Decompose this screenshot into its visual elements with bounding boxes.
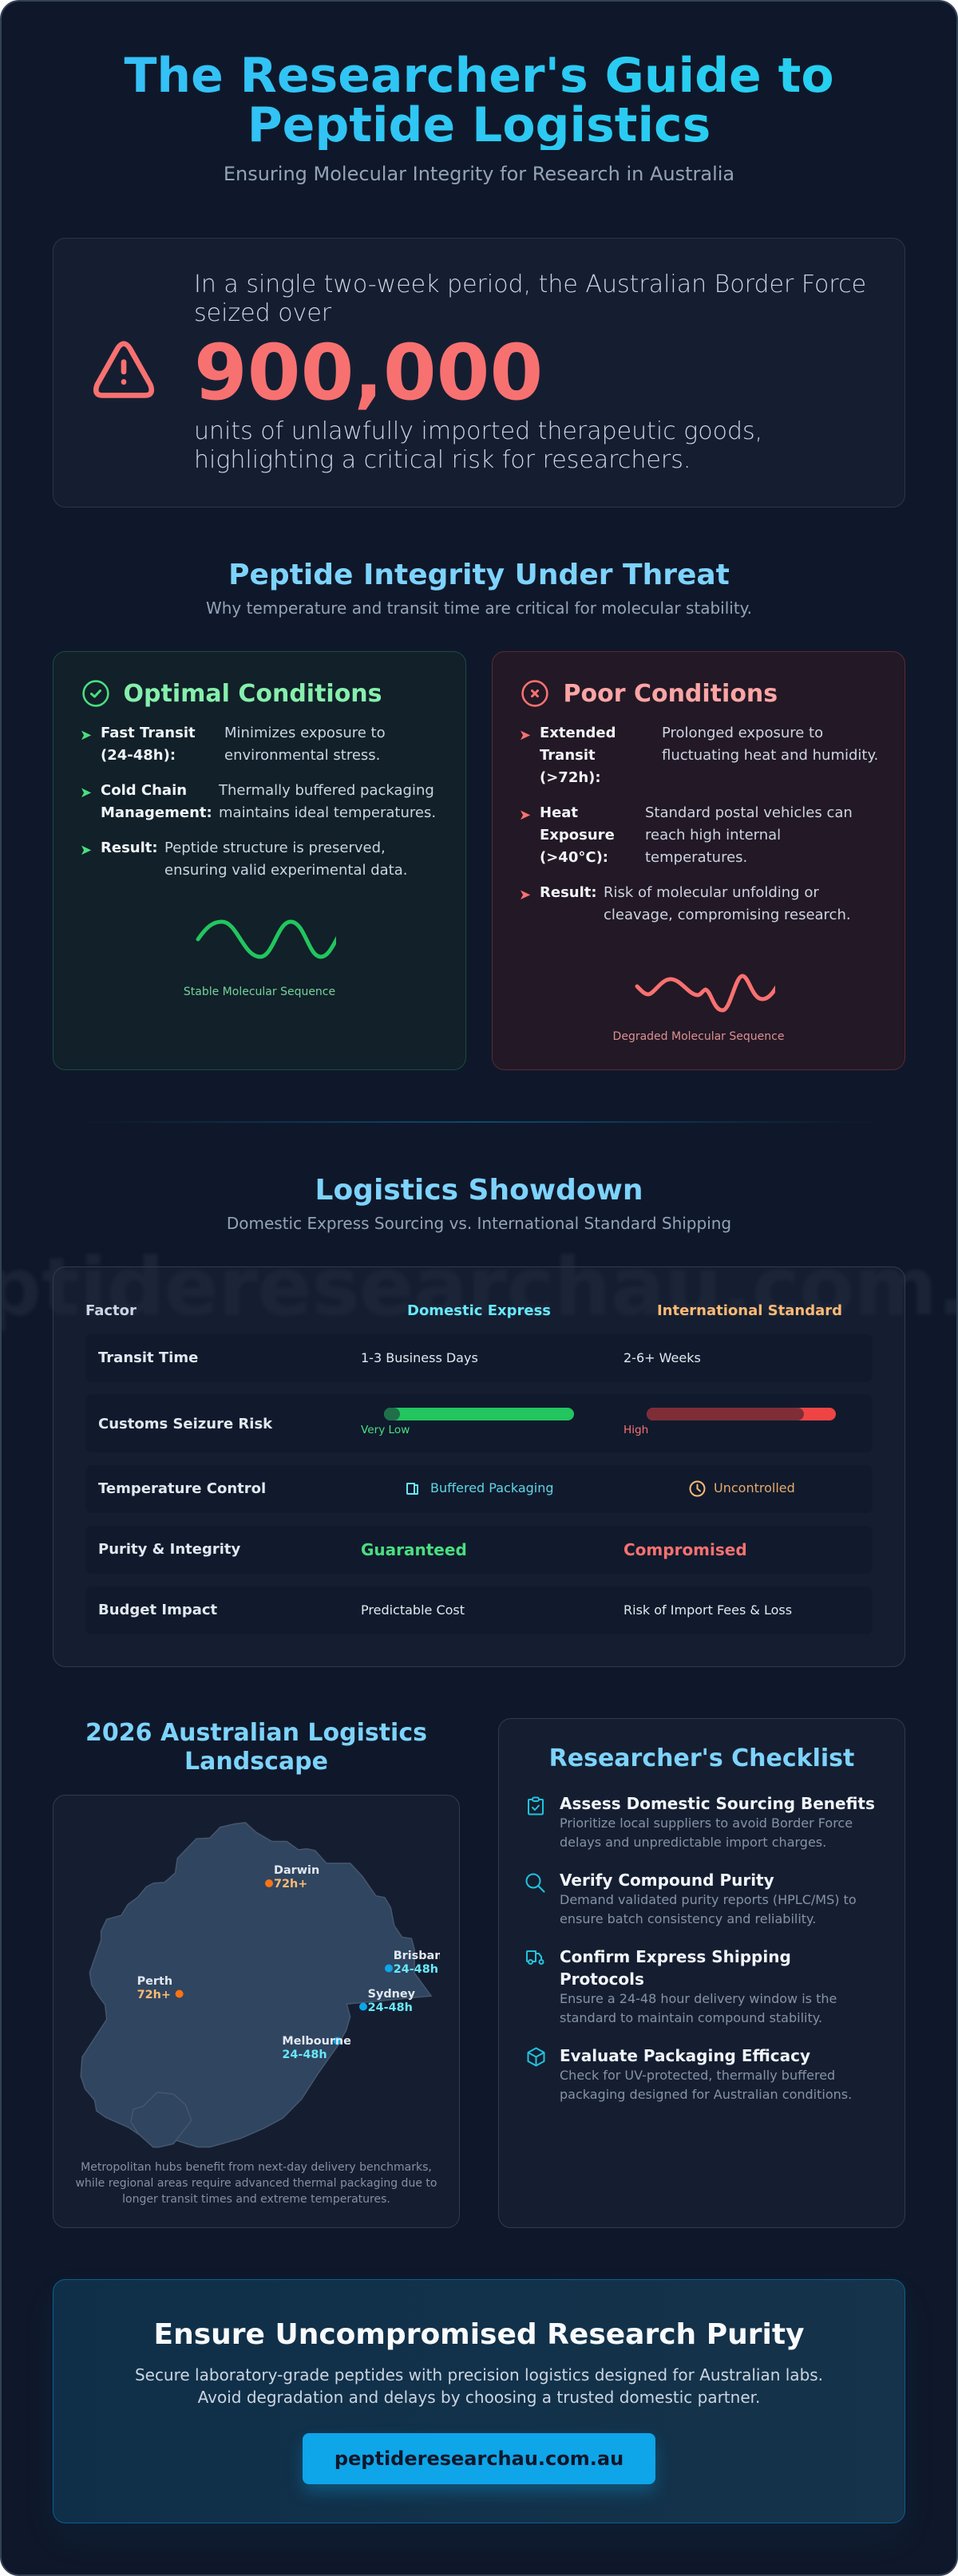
domestic risk label: Very Low xyxy=(361,1424,410,1436)
icon: check circle xyxy=(82,680,109,707)
bullet 2: Thermally buffered packaging xyxy=(219,782,434,799)
city: Brisbane: 24-48h xyxy=(394,1963,438,1976)
bullet 3 xyxy=(80,840,407,879)
icon: search xyxy=(525,1874,544,1893)
CTA button: peptideresearchau.com.au xyxy=(335,2448,623,2470)
item text xyxy=(560,2068,852,2102)
icon: package xyxy=(406,1483,418,1495)
CTA button xyxy=(303,2433,655,2484)
stable caption: Stable Molecular Sequence xyxy=(184,986,335,998)
checklist heading: Researcher's Checklist xyxy=(549,1744,854,1772)
bullet 3: Risk of molecular unfolding or xyxy=(604,884,819,901)
header: factor: Factor xyxy=(85,1302,137,1319)
bullet 1: Fast Transit xyxy=(101,725,196,741)
bullet 2: Cold Chain xyxy=(101,782,187,799)
bullet 2 xyxy=(519,804,853,866)
divider xyxy=(80,1121,878,1123)
item text: packaging designed for Australian conditions. xyxy=(560,2087,852,2102)
international risk label: High xyxy=(623,1424,648,1436)
bullet 1: ➤ xyxy=(519,727,531,744)
panel: checklist xyxy=(498,1718,905,2228)
bullet 1 xyxy=(80,725,386,764)
city: Melbourne xyxy=(283,2036,351,2058)
item 4 xyxy=(527,2046,852,2102)
panel: poor conditions xyxy=(492,651,905,1070)
poor heading: Poor Conditions xyxy=(564,680,778,708)
map caption: Metropolitan hubs benefit from next-day delivery benchmarks, xyxy=(81,2161,432,2174)
big number: 900,000 xyxy=(194,328,543,417)
bullet 2: Exposure xyxy=(540,827,615,844)
item text: Ensure a 24-48 hour delivery window is the xyxy=(560,1991,837,2006)
bullet 1: (24-48h): xyxy=(101,747,176,764)
title: The Researcher's Guide to xyxy=(124,48,834,104)
city: Brisbane: Brisbane xyxy=(394,1950,451,1962)
bullet 1: fluctuating heat and humidity. xyxy=(662,747,878,764)
item text xyxy=(560,1815,853,1850)
panel: map xyxy=(53,1795,460,2228)
domestic value: Predictable Cost xyxy=(361,1602,465,1618)
subheading: showdown: Domestic Express Sourcing vs. International Standard Shipping xyxy=(227,1214,731,1233)
bar: international risk xyxy=(647,1408,836,1420)
item 2 xyxy=(525,1871,857,1926)
bullet 1: Extended xyxy=(540,725,616,741)
item title xyxy=(560,1947,791,1989)
alert lead text: In a single two-week period, the Australian Border Force xyxy=(194,271,866,298)
title: Peptide Logistics xyxy=(247,97,711,153)
city: Perth xyxy=(137,1976,184,1998)
bullet 2: Management: xyxy=(101,804,212,821)
map caption: while regional areas require advanced thermal packaging due to xyxy=(76,2177,437,2190)
label: Customs Seizure Risk xyxy=(98,1416,272,1432)
bar: domestic risk xyxy=(384,1408,574,1420)
icon: x circle xyxy=(521,680,548,707)
bullet 3: cleavage, compromising research. xyxy=(604,907,851,923)
bullet 1: environmental stress. xyxy=(224,747,380,764)
item text: standard to maintain compound stability. xyxy=(560,2010,822,2025)
panel: optimal conditions xyxy=(53,651,466,1070)
item text: delays and unpredictable import charges. xyxy=(560,1835,826,1850)
item 3 xyxy=(526,1947,837,2025)
uncontrolled text: Uncontrolled xyxy=(714,1480,795,1495)
label: Budget Impact xyxy=(98,1602,217,1618)
map of Australia xyxy=(80,1822,440,2148)
icon: clock xyxy=(690,1481,706,1497)
alert tail text: units of unlawfully imported therapeutic goods, xyxy=(194,417,762,445)
label: Transit Time xyxy=(98,1349,198,1366)
bullet 2: Standard postal vehicles can xyxy=(645,804,853,821)
city: Perth: Perth xyxy=(137,1975,172,1988)
header: international: International Standard xyxy=(657,1302,842,1319)
bullet 2: temperatures. xyxy=(645,849,747,866)
item text: Check for UV-protected, thermally buffered xyxy=(560,2068,835,2083)
map caption: longer transit times and extreme temperatures. xyxy=(122,2193,390,2206)
bullet 1: Prolonged exposure to xyxy=(662,725,823,741)
bullet 3 xyxy=(519,884,851,923)
CTA heading: Ensure Uncompromised Research Purity xyxy=(153,2318,805,2351)
bullet 2: ➤ xyxy=(519,807,531,824)
bullet 3: Result: xyxy=(101,840,158,856)
chart: stable wave xyxy=(196,919,336,959)
alert tail text xyxy=(194,417,762,474)
bullet 2 xyxy=(80,782,436,821)
row: budget xyxy=(85,1586,873,1634)
bullet 2: reach high internal xyxy=(645,827,781,844)
heading: showdown: Logistics Showdown xyxy=(315,1174,643,1207)
icon: warning triangle xyxy=(93,341,155,398)
item title: Assess Domestic Sourcing Benefits xyxy=(560,1794,875,1813)
city: Darwin: Darwin xyxy=(274,1864,319,1877)
heading: map: 2026 Australian Logistics xyxy=(85,1719,427,1747)
international value: 2-6+ Weeks xyxy=(623,1350,701,1365)
bullet 1 xyxy=(519,725,878,786)
international value: Risk of Import Fees & Loss xyxy=(623,1602,792,1618)
buffered text: Buffered Packaging xyxy=(430,1480,554,1495)
bullet 2: ➤ xyxy=(80,784,92,801)
optimal heading: Optimal Conditions xyxy=(123,680,382,708)
bullet 1: (>72h): xyxy=(540,769,601,786)
item text: Prioritize local suppliers to avoid Border Force xyxy=(560,1815,853,1831)
city: Brisbane xyxy=(385,1950,440,1973)
bullet 3: Peptide structure is preserved, xyxy=(164,840,386,856)
icon: truck xyxy=(526,1950,544,1965)
bullet 1: Transit xyxy=(540,747,596,764)
bullet 1: Minimizes exposure to xyxy=(224,725,386,741)
bullet 2: Heat xyxy=(540,804,578,821)
alert lead text xyxy=(194,271,866,327)
CTA text xyxy=(135,2365,823,2407)
bullet 1: ➤ xyxy=(80,727,92,744)
CTA text: Avoid degradation and delays by choosing a trusted domestic partner. xyxy=(198,2388,760,2407)
bullet 3: Result: xyxy=(540,884,597,901)
row: transit time xyxy=(85,1334,873,1382)
domestic value: Guaranteed xyxy=(361,1540,467,1559)
degraded caption: Degraded Molecular Sequence xyxy=(613,1030,784,1043)
label: Temperature Control xyxy=(98,1480,266,1497)
bullet 2: (>40°C): xyxy=(540,849,608,866)
bullet 2: maintains ideal temperatures. xyxy=(219,804,436,821)
item title: Confirm Express Shipping xyxy=(560,1947,791,1966)
alert lead text: seized over xyxy=(194,299,331,327)
heading: map: Landscape xyxy=(184,1748,328,1776)
item text xyxy=(560,1991,837,2025)
item text: ensure batch consistency and reliability. xyxy=(560,1911,816,1926)
map caption xyxy=(76,2161,437,2206)
subtitle: Ensuring Molecular Integrity for Research in Australia xyxy=(224,163,734,185)
city: Sydney xyxy=(359,1989,415,2011)
heading: map xyxy=(85,1719,427,1776)
item text: Demand validated purity reports (HPLC/MS) to xyxy=(560,1892,857,1907)
city: Perth: 72h+ xyxy=(137,1989,171,2001)
item title: Evaluate Packaging Efficacy xyxy=(560,2046,810,2065)
bullet 3: ➤ xyxy=(519,887,531,903)
panel: seizure alert xyxy=(53,238,905,508)
bullet 3: ➤ xyxy=(80,842,92,859)
row: temperature xyxy=(85,1465,873,1513)
row: customs risk xyxy=(85,1394,873,1452)
city: Sydney: 24-48h xyxy=(368,2001,413,2014)
city: Sydney: Sydney xyxy=(368,1988,416,2001)
city: Darwin xyxy=(265,1865,319,1887)
panel: comparison table xyxy=(53,1266,905,1667)
subheading: integrity: Why temperature and transit time are critical for molecular stability. xyxy=(206,599,752,618)
item 1 xyxy=(528,1794,875,1850)
alert tail text: highlighting a critical risk for researchers. xyxy=(194,446,691,474)
heading: integrity: Peptide Integrity Under Threat xyxy=(228,559,730,591)
item title: Verify Compound Purity xyxy=(560,1871,774,1890)
icon: clipboard xyxy=(528,1797,544,1815)
label: Purity & Integrity xyxy=(98,1541,240,1558)
CTA text: Secure laboratory-grade peptides with precision logistics designed for Australian labs. xyxy=(135,2365,823,2384)
city: Melbourne: Melbourne xyxy=(282,2035,351,2048)
city: Melbourne: 24-48h xyxy=(282,2049,327,2061)
icon: box xyxy=(527,2048,544,2067)
international value: Compromised xyxy=(623,1540,747,1559)
bullet 3: ensuring valid experimental data. xyxy=(164,862,407,879)
city: Darwin: 72h+ xyxy=(274,1878,307,1891)
row: purity xyxy=(85,1526,873,1574)
title xyxy=(0,52,958,150)
header: domestic: Domestic Express xyxy=(407,1302,551,1319)
chart: degraded wave xyxy=(635,974,775,1012)
panel: call to action xyxy=(53,2279,905,2523)
item text xyxy=(560,1892,857,1926)
item title: Protocols xyxy=(560,1970,644,1989)
domestic value: 1-3 Business Days xyxy=(361,1350,478,1365)
